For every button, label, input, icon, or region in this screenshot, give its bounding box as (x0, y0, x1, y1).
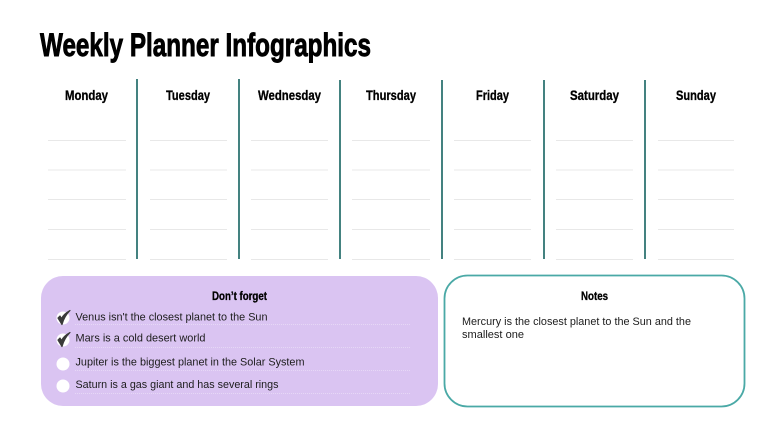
text: notes body: smallest one (462, 329, 524, 341)
heading: notes: Notes (581, 291, 608, 303)
column: Saturday (556, 87, 633, 260)
heading: don't forget: Don’t forget (212, 291, 267, 303)
checklist item: Saturn: Saturn is a gas giant and has several rings (76, 379, 279, 391)
checklist item: Jupiter: Jupiter is the biggest planet in the Solar System (76, 356, 304, 368)
column: Tuesday: Tuesday (166, 87, 210, 103)
title: Weekly Planner Infographics (40, 27, 371, 63)
column: Friday (454, 87, 531, 260)
column: Sunday (658, 87, 734, 260)
checklist item: Mars: Mars is a cold desert world (76, 332, 206, 344)
panel: weekly columns (48, 79, 734, 260)
text: notes body: Mercury is the closest planet to the Sun and the (462, 316, 691, 328)
column: Wednesday: Wednesday (258, 87, 321, 103)
checklist item: Venus: Venus isn't the closest planet to the Sun (76, 312, 268, 324)
column: Wednesday (251, 87, 328, 260)
panel: don't forget (41, 276, 438, 406)
column: Tuesday (150, 87, 227, 260)
column: Saturday: Saturday (570, 87, 619, 103)
column: Sunday: Sunday (676, 87, 716, 103)
column: Monday: Monday (65, 87, 108, 103)
column: Thursday: Thursday (366, 87, 416, 103)
column: Thursday (352, 87, 430, 260)
column: Friday: Friday (476, 87, 509, 103)
panel: notes (444, 276, 744, 406)
column: Monday (48, 87, 126, 260)
